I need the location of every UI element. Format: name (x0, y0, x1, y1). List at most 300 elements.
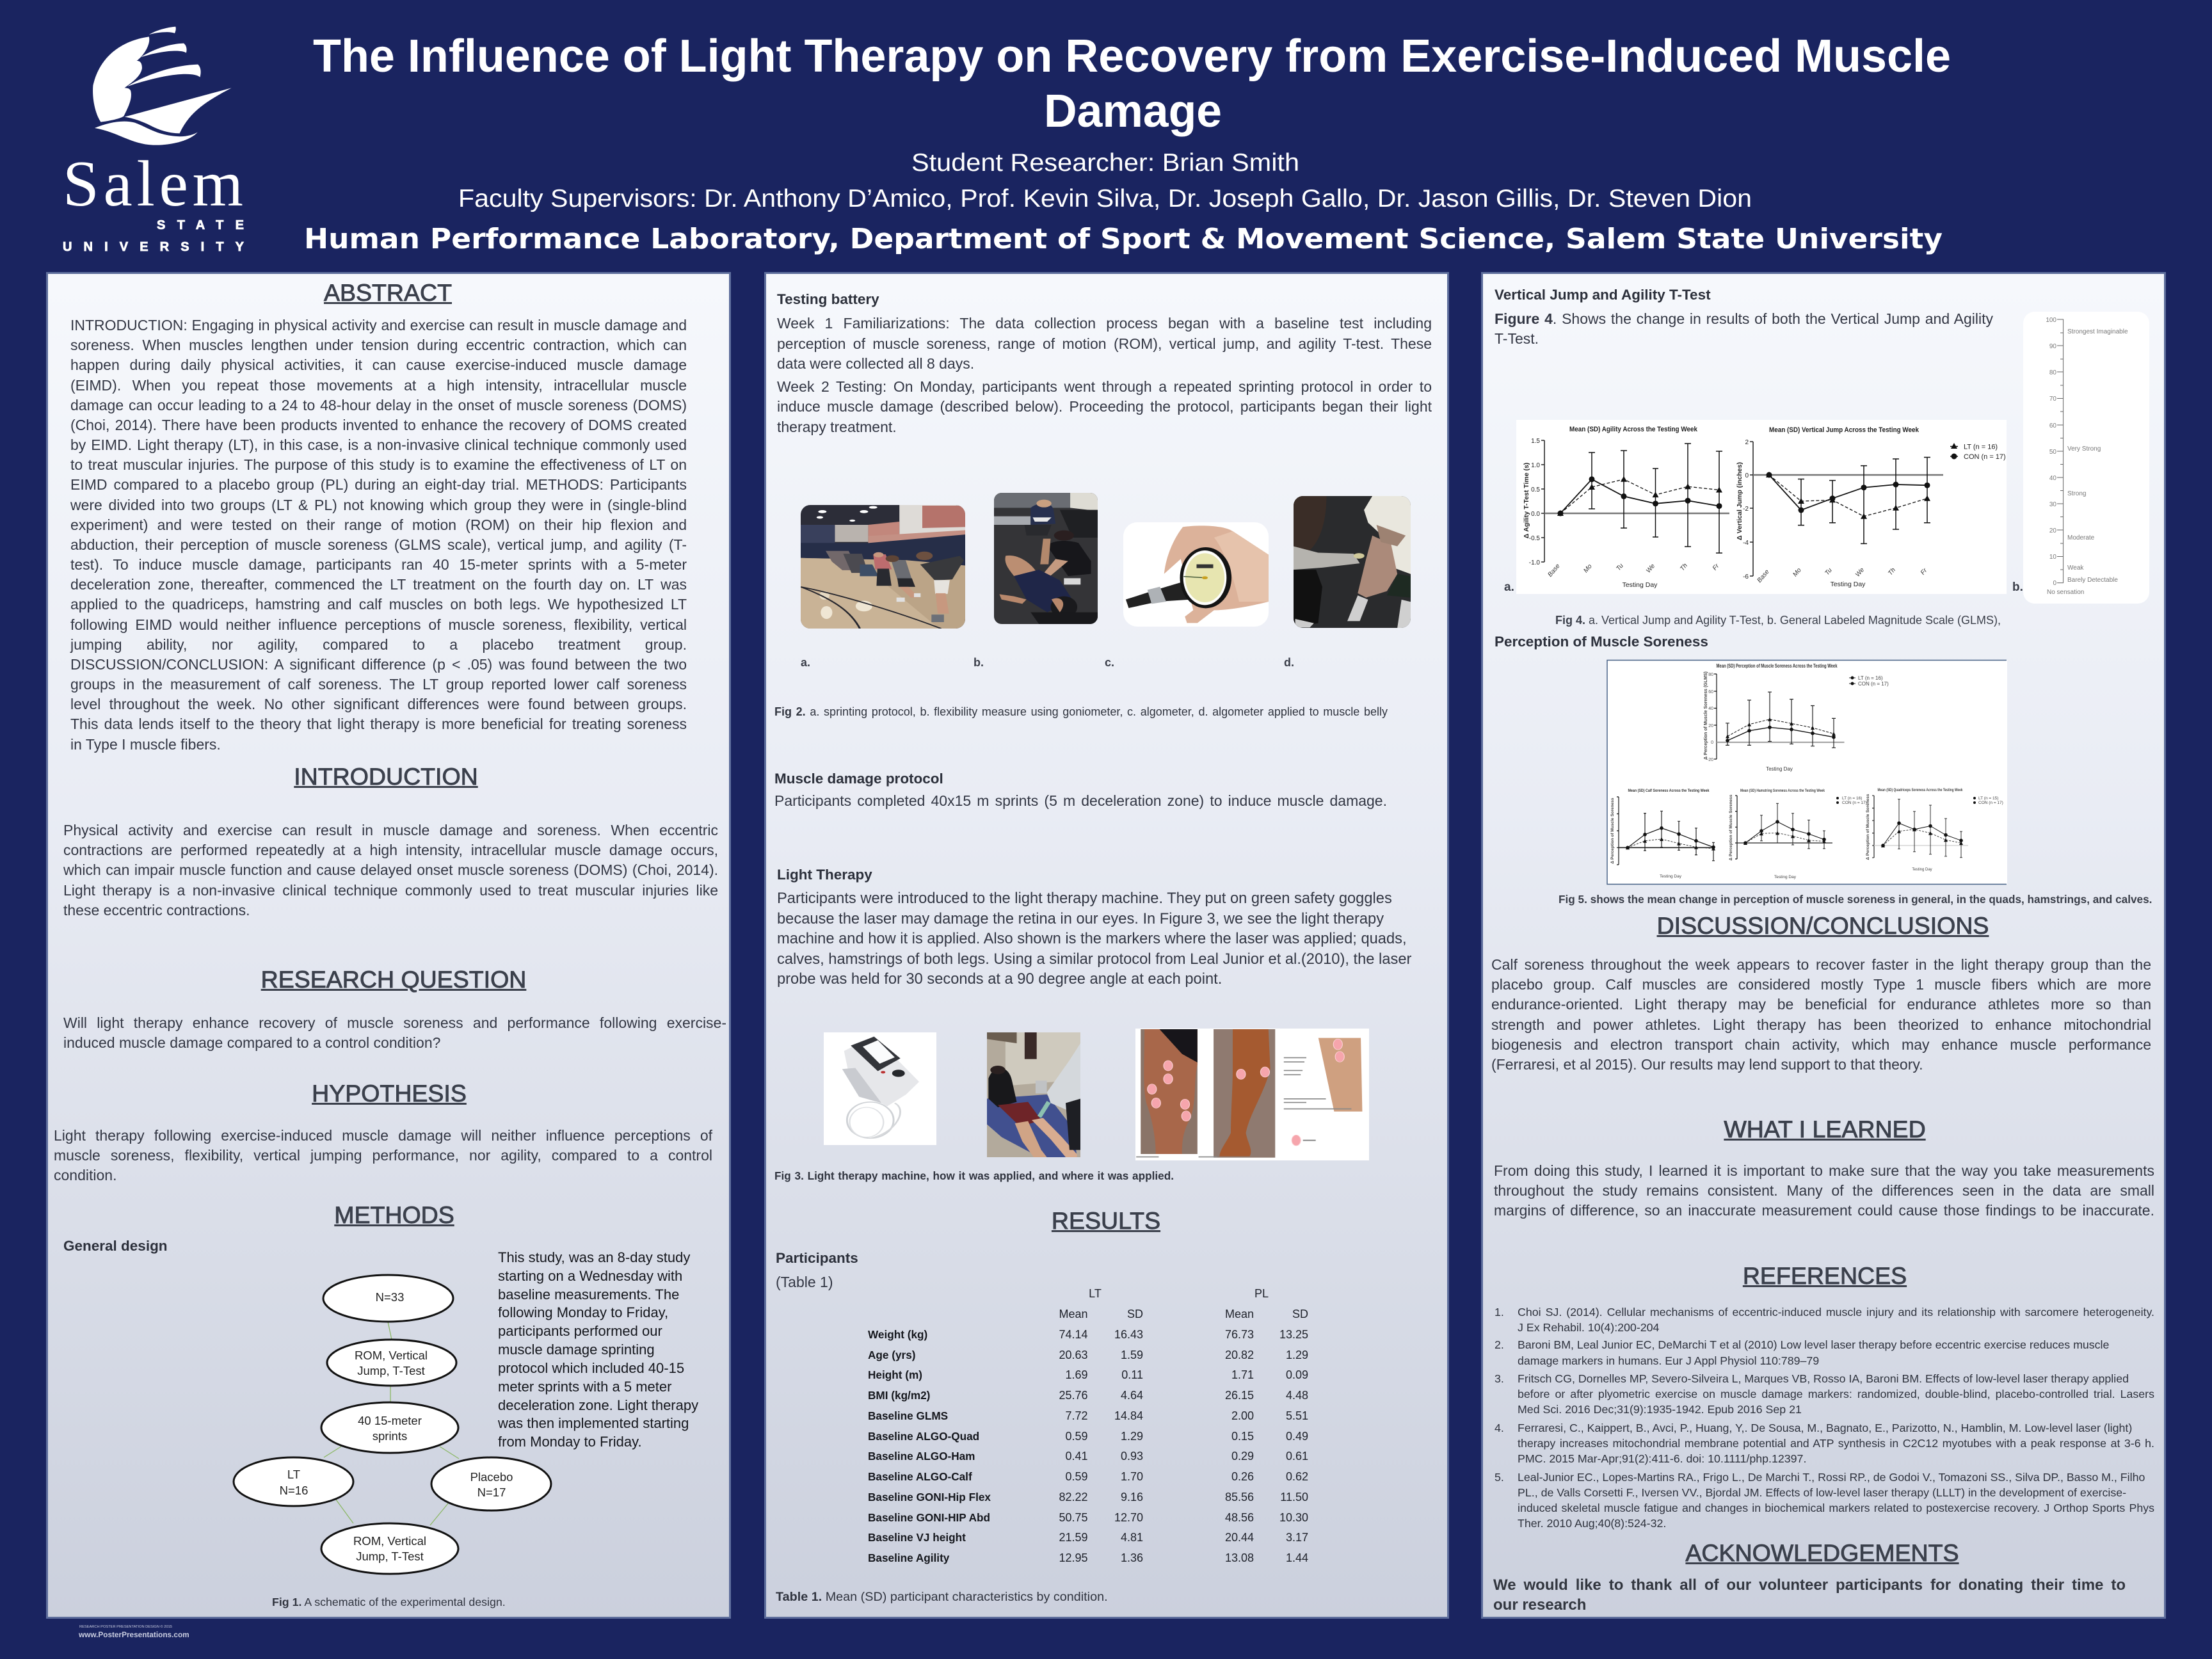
study description text: participants performed our (498, 1323, 662, 1339)
icon: ship sails (93, 27, 232, 145)
node: N=33 (323, 1275, 453, 1322)
chart a: agility: 1.5 (1531, 438, 1540, 445)
chart a: vertical jump: Base (1756, 568, 1771, 584)
chart a: agility: Δ Agility T-Test Time (s) (1523, 463, 1530, 538)
chart: general soreness: CON (n = 17) (1858, 681, 1889, 687)
chart: hamstring soreness: Testing Day (1774, 875, 1797, 879)
photo labels: figure 2 (801, 656, 1294, 669)
node: N=33: N=33 (376, 1290, 404, 1304)
light therapy text: Participants were introduced to the light therapy machine. They put on green safety goggles (777, 890, 1392, 907)
subheading: perception of muscle soreness: Perception of Muscle Soreness (1495, 634, 1708, 650)
table: participant characteristics: 11.50 (1280, 1491, 1308, 1503)
chart: general labeled magnitude scale: 20 (2049, 527, 2056, 534)
chart a: agility: Base (1547, 563, 1562, 579)
abstract text: happen during daily physical activities, it can cause exercise-induced muscle damage (70, 357, 687, 373)
table: participant characteristics: 13.08 (1225, 1551, 1254, 1564)
node: baseline tests (327, 1340, 456, 1386)
chart a: vertical jump: Th (1887, 566, 1897, 577)
photo: algometer (1123, 522, 1269, 627)
table: participant characteristics: 1.71 (1231, 1368, 1254, 1381)
reference list: Fritsch CG, Dornelles MP, Severo-Silveira L, Marques VB, Rosso IA, Baroni BM. Effects of low-level laser therapy applied (1518, 1372, 2129, 1385)
node: placebo group: Placebo (470, 1470, 513, 1484)
table: participant characteristics: 20.44 (1225, 1531, 1254, 1544)
table: participant characteristics: BMI (kg/m2) (868, 1389, 930, 1402)
footer credit: RESEARCH POSTER PRESENTATION DESIGN © 2015 (79, 1625, 172, 1629)
header block (304, 31, 1951, 255)
table: participant characteristics: 0.59 (1065, 1470, 1088, 1483)
testing battery text: Week 2 Testing: On Monday, participants went through a repeated sprinting protocol in order to (777, 378, 1432, 394)
table: participant characteristics: 14.84 (1114, 1409, 1143, 1422)
affiliation: Human Performance Laboratory, Department of Sport & Movement Science, Salem State University (304, 223, 1943, 255)
table: participant characteristics: 12.95 (1059, 1551, 1088, 1564)
table: participant characteristics: 1.59 (1121, 1349, 1143, 1361)
photo: algometer applied (1294, 496, 1411, 628)
chart: general soreness (1704, 663, 1889, 772)
chart: general soreness: 40 (1708, 707, 1713, 711)
study description text: deceleration zone. Light therapy (498, 1397, 698, 1413)
panel: figures and discussion column (1481, 272, 2166, 1619)
chart: hamstring soreness: LT (n = 16) (1842, 796, 1862, 801)
table: participant characteristics: 48.56 (1225, 1511, 1254, 1524)
chart: hamstring soreness (1729, 789, 1867, 879)
title: Damage (1044, 86, 1222, 137)
legend: LT (n = 16) (1964, 443, 1998, 451)
legend: CON (n = 17) (1964, 453, 2006, 461)
hypothesis text: condition. (54, 1167, 116, 1183)
logo wordmark: University: UNIVERSITY (63, 240, 244, 254)
heading: research question: RESEARCH QUESTION (261, 966, 526, 993)
table: participant characteristics: 5.51 (1286, 1409, 1308, 1422)
table: participant characteristics: 20.63 (1059, 1349, 1088, 1361)
flow chart: experimental design (233, 1274, 552, 1575)
table: participant characteristics: 16.43 (1114, 1328, 1143, 1341)
study description text (498, 1249, 698, 1450)
chart a: vertical jump: -2 (1743, 506, 1749, 513)
testing battery text: data were collected all 8 days. (777, 355, 974, 372)
table: participant characteristics: Baseline ALGO-Ham (868, 1450, 975, 1463)
chart: agility and vertical jump (1516, 420, 2007, 594)
reference list: damage markers in humans. Eur J Appl Physiol 110:789–79 (1518, 1354, 1819, 1367)
chart: general labeled magnitude scale: Moderate (2067, 534, 2095, 541)
table: participant characteristics: Baseline Agility (868, 1551, 949, 1564)
chart: calf soreness (1610, 789, 1715, 879)
table: participant characteristics: Baseline GONI-HIP Abd (868, 1511, 990, 1524)
logo wordmark: Salem: Salem (63, 148, 243, 220)
table: participant characteristics: 0.09 (1286, 1368, 1308, 1381)
chart: general labeled magnitude scale: 100 (2046, 317, 2056, 324)
abstract text: level throughout the week. No other significant differences were found between groups. (70, 696, 687, 712)
chart a: vertical jump: Δ Vertical Jump (inches) (1736, 462, 1743, 540)
chart a: vertical jump (1736, 426, 2006, 588)
table: participant characteristics: 20.82 (1225, 1349, 1254, 1361)
table: participant characteristics: 25.76 (1059, 1389, 1088, 1402)
abstract text: following EIMD would neither influence perceptions of muscle soreness, flexibility, vertical (70, 616, 687, 633)
abstract text: EIMD compared to a placebo group (PL) during an eight-day trial. METHODS: Participants (70, 476, 687, 493)
table: participant characteristics: 1.44 (1286, 1551, 1308, 1564)
introduction text: contractions are performed repeatedly at a high intensity, intracellular muscle damage occurs, (63, 842, 718, 858)
acknowledgements text: our research (1493, 1596, 1586, 1614)
table: participant characteristics: 85.56 (1225, 1491, 1254, 1503)
chart a: vertical jump: -6 (1743, 573, 1749, 581)
chart: general labeled magnitude scale: 0 (2053, 580, 2056, 587)
abstract text: to treat muscular injuries. The purpose of this study is to examine the effectiveness of LT on (70, 456, 687, 473)
reference list: induced skeletal muscle fatigue and changes in biochemical markers related to postexercise recovery. J Orthop Sports Phys (1518, 1502, 2154, 1514)
reference list: 4. (1495, 1422, 1504, 1434)
table: participant characteristics: PL (1254, 1287, 1269, 1300)
caption: figure 2: Fig 2. a. sprinting protocol, b. flexibility measure using goniometer, c. algometer, d. algometer applied to muscle belly (774, 705, 1388, 718)
reference list: Med Sci. 2016 Dec;31(9):1935-1942. Epub 2016 Sep 21 (1518, 1403, 1802, 1416)
chart: general labeled magnitude scale: 60 (2049, 422, 2056, 429)
table: participant characteristics: Baseline ALGO-Quad (868, 1430, 979, 1443)
node: post tests (321, 1523, 458, 1574)
chart a: agility: Testing Day (1623, 581, 1658, 589)
reference list: Leal-Junior EC., Lopes-Martins RA., Frigo L., De Marchi T., Rossi RP., de Godoi V., Tomazoni SS., Silva DP., Basso M., Filho (1518, 1471, 2145, 1484)
chart: calf soreness: Mean (SD) Calf Soreness Across the Testing Week (1628, 789, 1710, 793)
table: participant characteristics: 3.17 (1286, 1531, 1308, 1544)
discussion text: biogenesis and electron transport chain activity, which may enhance muscle performance (1491, 1036, 2151, 1053)
table: participant characteristics (868, 1287, 1308, 1564)
chart: general labeled magnitude scale: Very Strong (2067, 445, 2101, 453)
subheading: testing battery: Testing battery (777, 291, 879, 307)
chart: general soreness: 80 (1708, 673, 1713, 677)
abstract text: test). To induce muscle damage, participants ran 40 15-meter sprints with a 5-meter (70, 556, 687, 573)
what I learned text: From doing this study, I learned it is important to make sure that the way you take measurements (1494, 1162, 2154, 1179)
figure 4 intro text: T-Test. (1495, 330, 1539, 347)
table: participant characteristics: 0.26 (1231, 1470, 1254, 1483)
study description text: protocol which included 40-15 (498, 1360, 684, 1376)
chart a: agility: Th (1679, 562, 1689, 572)
node: sprints (321, 1402, 458, 1453)
abstract text (70, 317, 687, 753)
abstract text: (Choi, 2014). There have been products invented to enhance the recovery of DOMS created (70, 417, 687, 433)
chart: general labeled magnitude scale: 80 (2049, 369, 2056, 376)
chart: calf soreness: Δ Perception of Muscle Soreness (1610, 797, 1615, 863)
acknowledgements text (1493, 1576, 2126, 1614)
chart labels a and b: a. (1504, 581, 1514, 594)
legend (1950, 443, 2006, 461)
chart a: agility: 0.0 (1531, 511, 1540, 518)
abstract text: deceleration zone, thereafter, commenced the LT treatment on the fourth day on. LT was (70, 576, 687, 593)
table: participant characteristics: 0.49 (1286, 1430, 1308, 1443)
chart: general soreness: 60 (1708, 690, 1713, 694)
chart a: vertical jump: We (1854, 566, 1866, 579)
table: participant characteristics: 0.62 (1286, 1470, 1308, 1483)
subheading: vertical jump and agility: Vertical Jump and Agility T-Test (1495, 287, 1711, 303)
table: participant characteristics: 4.64 (1121, 1389, 1143, 1402)
university logo (63, 27, 244, 254)
chart: general soreness: -20 (1707, 758, 1713, 762)
table: participant characteristics: Age (yrs) (868, 1349, 915, 1361)
table: participant characteristics: Mean (1225, 1308, 1254, 1320)
reference list: before or after plyometric exercise on muscle damage markers: randomized, double-blind, placebo-controlled trial. Lasers (1518, 1388, 2154, 1400)
table: participant characteristics: 0.11 (1121, 1368, 1143, 1381)
chart: general soreness: LT (n = 16) (1858, 675, 1883, 681)
photo labels: figure 2: a. (801, 656, 810, 669)
abstract text: (EIMD). When you repeat those movements at a high intensity, intracellular muscle (70, 377, 687, 394)
introduction text: these eccentric contractions. (63, 902, 250, 918)
table: participant characteristics: 1.36 (1121, 1551, 1143, 1564)
discussion text: strength and power athletes. Light therapy has been theorized to enhance mitochondrial (1491, 1016, 2151, 1033)
chart: general labeled magnitude scale: 50 (2049, 449, 2056, 456)
chart labels a and b: b. (2012, 581, 2023, 594)
node: post tests: ROM, Vertical (353, 1534, 426, 1548)
chart a: agility: Fr (1711, 563, 1721, 572)
chart: general soreness: Mean (SD) Perception of Muscle Soreness Across the Testing Week (1717, 663, 1838, 669)
chart: quadriceps soreness: CON (n = 17) (1978, 801, 2003, 805)
chart a: vertical jump: Fr (1919, 567, 1929, 577)
node: LT group (234, 1457, 353, 1506)
chart: general soreness: 0 (1711, 741, 1713, 745)
table: participant characteristics: Height (m) (868, 1368, 922, 1381)
reference list: J Ex Rehabil. 10(4):200-204 (1518, 1321, 1659, 1334)
study description text: This study, was an 8-day study (498, 1249, 690, 1265)
chart a: vertical jump: Tu (1823, 566, 1834, 577)
chart: calf soreness: Testing Day (1660, 874, 1682, 879)
table: participant characteristics: 76.73 (1225, 1328, 1254, 1341)
reference list: 5. (1495, 1471, 1504, 1484)
chart: muscle soreness (1607, 659, 2007, 885)
chart: general labeled magnitude scale: Strong (2067, 490, 2086, 497)
research question text: Will light therapy enhance recovery of muscle soreness and performance following exercise- (63, 1014, 726, 1031)
chart: general labeled magnitude scale: 70 (2049, 396, 2056, 403)
chart a: agility: 0.5 (1531, 486, 1540, 493)
hypothesis text: muscle soreness, flexibility, vertical jumping performance, nor agility, compared to a control (54, 1147, 712, 1164)
chart a: vertical jump: -4 (1743, 540, 1749, 547)
logo wordmark: State: STATE (157, 218, 244, 232)
study description text: meter sprints with a 5 meter (498, 1379, 671, 1395)
table: participant characteristics: 4.81 (1121, 1531, 1143, 1544)
study description text: muscle damage sprinting (498, 1342, 655, 1358)
caption: figure 3: Fig 3. Light therapy machine, how it was applied, and where it was applied. (774, 1169, 1174, 1182)
table: participant characteristics: 82.22 (1059, 1491, 1088, 1503)
node: baseline tests: ROM, Vertical (355, 1349, 428, 1362)
abstract text: in Type I muscle fibers. (70, 736, 221, 753)
reference list: 1. (1495, 1306, 1504, 1318)
table: participant characteristics: Mean (1059, 1308, 1088, 1320)
table: participant characteristics: 26.15 (1225, 1389, 1254, 1402)
reference list: PMC. 2015 Mar-Apr;91(2):411-6. doi: 10.1111/php.12397. (1518, 1452, 1806, 1465)
chart: general soreness: Testing Day (1766, 766, 1793, 772)
chart a: vertical jump: 0 (1745, 472, 1749, 479)
table: participant characteristics: Baseline GONI-Hip Flex (868, 1491, 991, 1503)
table: participant characteristics: 9.16 (1121, 1491, 1143, 1503)
node: LT group: N=16 (280, 1484, 308, 1497)
table: participant characteristics: 50.75 (1059, 1511, 1088, 1524)
chart: hamstring soreness: Δ Perception of Muscle Soreness (1729, 794, 1733, 860)
reference list: therapy increases mitochondrial membrane potential and ATP synthesis in C2C12 myotubes with a peak response at 3-6 h. (1518, 1437, 2154, 1450)
abstract text: applied to the quadriceps, hamstring and calf muscles on both legs. We hypothesized LT (70, 596, 687, 613)
chart a: agility: Mean (SD) Agility Across the Testing Week (1569, 426, 1698, 433)
study description text: was then implemented starting (498, 1415, 689, 1431)
photo: sprinting protocol (801, 505, 965, 629)
light therapy text: because the laser may damage the retina in our eyes. In Figure 3, we see the light therapy (777, 910, 1384, 927)
testing battery text: induce muscle damage (described below). Proceeding the protocol, participants began their light (777, 398, 1432, 415)
chart a: agility: Mo (1582, 563, 1594, 574)
introduction text: Physical activity and exercise can result in muscle damage and soreness. When eccentric (63, 822, 718, 838)
caption: figure 5: Fig 5. shows the mean change in perception of muscle soreness in general, in the quads, hamstrings, and calves. (1559, 893, 2152, 906)
research question text: induced muscle damage compared to a control condition? (63, 1034, 440, 1051)
abstract text: This data lends itself to the theory that light therapy is more beneficial for treating soreness (70, 716, 687, 732)
light therapy text (777, 890, 1411, 988)
study description text: following Monday to Friday, (498, 1304, 668, 1320)
figure 4 intro text (1495, 310, 1993, 347)
chart a: vertical jump: Mo (1791, 566, 1803, 578)
discussion text: placebo group. Calf muscles are considered mostly Type 1 muscle fibers which are more (1491, 976, 2151, 993)
chart: quadriceps soreness: LT (n = 15) (1978, 796, 1998, 801)
heading: introduction: INTRODUCTION (294, 763, 478, 790)
photo labels: figure 2: c. (1105, 656, 1114, 669)
study description text: from Monday to Friday. (498, 1434, 642, 1450)
heading: hypothesis: HYPOTHESIS (312, 1080, 467, 1107)
light therapy text: machine and how it is applied. Also shown is the markers where the laser was applied; quads, (777, 931, 1407, 947)
student researcher: Student Researcher: Brian Smith (911, 149, 1299, 177)
chart a: agility (1523, 426, 1729, 589)
table: participant characteristics: 1.29 (1286, 1349, 1308, 1361)
table: participant characteristics: 0.15 (1231, 1430, 1254, 1443)
caption: table 1: Table 1. Mean (SD) participant characteristics by condition. (776, 1590, 1108, 1604)
what I learned text: throughout the study remains consistent. Many of the differences seen in the data are small (1494, 1182, 2154, 1199)
chart: quadriceps soreness: Δ Perception of Muscle Soreness (1866, 794, 1870, 860)
chart: general labeled magnitude scale: 90 (2049, 343, 2056, 350)
subheading: light therapy: Light Therapy (777, 867, 872, 883)
table: participant characteristics: 1.70 (1121, 1470, 1143, 1483)
study description text: starting on a Wednesday with (498, 1268, 682, 1284)
photo: laser being applied (987, 1032, 1080, 1157)
testing battery text: therapy treatment. (777, 419, 897, 435)
table: participant characteristics: 0.93 (1121, 1450, 1143, 1463)
photo: light therapy machine (824, 1032, 936, 1145)
chart a: agility: 1.0 (1531, 462, 1540, 469)
table reference: (Table 1) (776, 1274, 833, 1290)
abstract text: experiment) and were tested on their range of motion (ROM) on their hip flexion and (70, 517, 687, 533)
node: sprints: 40 15-meter (358, 1414, 422, 1427)
table: participant characteristics: 0.59 (1065, 1430, 1088, 1443)
footer credit: www.PosterPresentations.com (79, 1630, 189, 1639)
chart labels a and b (1504, 581, 2023, 594)
title (313, 31, 1951, 137)
abstract text: abduction, their perception of muscle soreness (GLMS scale), vertical jump, and agility (T- (70, 536, 687, 553)
reference list: Choi SJ. (2014). Cellular mechanisms of eccentric-induced muscle injury and its relationship with sarcomere heterogeneity. (1518, 1306, 2154, 1318)
node: placebo group (431, 1457, 551, 1511)
introduction text (63, 822, 718, 918)
reference list: 2. (1495, 1338, 1504, 1351)
title: The Influence of Light Therapy on Recovery from Exercise-Induced Muscle (313, 31, 1951, 82)
table: participant characteristics: SD (1127, 1308, 1143, 1320)
table: participant characteristics: 0.29 (1231, 1450, 1254, 1463)
what I learned text: margins of difference, so an inaccurate measurement could cause those findings to be inaccurate. (1494, 1202, 2154, 1219)
chart: general labeled magnitude scale: Weak (2067, 565, 2084, 572)
testing battery text (777, 315, 1432, 435)
discussion text (1491, 956, 2151, 1073)
muscle damage protocol text: Participants completed 40x15 m sprints (5 m deceleration zone) to induce muscle damage. (774, 792, 1387, 809)
photo: laser application points (1135, 1029, 1369, 1160)
photo labels: figure 2: d. (1284, 656, 1294, 669)
chart: hamstring soreness: CON (n = 17) (1842, 801, 1867, 805)
chart: general labeled magnitude scale: 10 (2049, 554, 2056, 561)
chart a: vertical jump: Mean (SD) Vertical Jump Across the Testing Week (1769, 426, 1919, 434)
discussion text: Calf soreness throughout the week appears to recover faster in the light therapy group than the (1491, 956, 2151, 973)
panel: testing and results column (764, 272, 1449, 1619)
table: participant characteristics: 0.61 (1286, 1450, 1308, 1463)
table: participant characteristics: 74.14 (1059, 1328, 1088, 1341)
introduction text: which can impair muscle function and cause delayed onset muscle soreness (DOMS) (Choi, 2014). (63, 862, 718, 878)
node: LT group: LT (287, 1468, 300, 1481)
what I learned text (1494, 1162, 2154, 1219)
introduction text: Light therapy is a non-invasive clinical technique commonly used to treat muscular injuries like (63, 882, 718, 899)
table: participant characteristics: Baseline ALGO-Calf (868, 1470, 972, 1483)
node: sprints: sprints (373, 1429, 407, 1443)
table: participant characteristics: 10.30 (1279, 1511, 1308, 1524)
heading: abstract: ABSTRACT (324, 279, 452, 306)
chart: quadriceps soreness: Testing Day (1912, 868, 1932, 872)
chart: quadriceps soreness (1866, 789, 2003, 872)
study description text: baseline measurements. The (498, 1286, 679, 1302)
chart a: agility: Tu (1615, 562, 1625, 572)
abstract text: damage can occur leading to a 24 to 48-hour delay in the onset of muscle soreness (DOMS) (70, 397, 687, 413)
reference list (1495, 1306, 2154, 1530)
table: participant characteristics: SD (1292, 1308, 1308, 1320)
chart: general labeled magnitude scale: 40 (2049, 475, 2056, 482)
heading: acknowledgements: ACKNOWLEDGEMENTS (1685, 1539, 1959, 1566)
table: participant characteristics: 13.25 (1279, 1328, 1308, 1341)
caption: figure 4: Fig 4. a. Vertical Jump and Agility T-Test, b. General Labeled Magnitude Scale (GLMS), (1555, 614, 2001, 627)
hypothesis text: Light therapy following exercise-induced muscle damage will neither influence perceptions of (54, 1127, 712, 1144)
footer credit (79, 1625, 189, 1639)
abstract text: by EIMD. Light therapy (LT), in this case, is a non-invasive clinical technique commonly used (70, 437, 687, 453)
research question text (63, 1014, 726, 1051)
table: participant characteristics: Baseline GLMS (868, 1409, 948, 1422)
light therapy text: calves, hamstrings of both legs. Using a similar protocol from Leal Junior et al.(2010), the laser (777, 951, 1411, 968)
abstract text: were divided into two groups (LT & PL) not knowing which group they were in (single-blind (70, 497, 687, 513)
subheading: general design: General design (63, 1238, 168, 1254)
table: participant characteristics: 4.48 (1286, 1389, 1308, 1402)
reference list: PL., de Valls Corsetti F., Iversen VV., Bjordal JM. Effects of low-level laser therapy (LLLT) in the development of exercise- (1518, 1486, 2126, 1499)
chart: quadriceps soreness: Mean (SD) Quadriceps Soreness Across the Testing Week (1878, 789, 1963, 792)
chart: general labeled magnitude scale: Strongest Imaginable (2067, 328, 2128, 335)
photo labels: figure 2: b. (974, 656, 984, 669)
node: placebo group: N=17 (477, 1486, 506, 1499)
figure 4 intro text: Figure 4. Shows the change in results of both the Vertical Jump and Agility (1495, 310, 1993, 327)
chart: general labeled magnitude scale: No sensation (2047, 589, 2084, 596)
table: participant characteristics: 0.41 (1065, 1450, 1088, 1463)
table: participant characteristics: 2.00 (1231, 1409, 1254, 1422)
table: participant characteristics: LT (1089, 1287, 1102, 1300)
chart: hamstring soreness: Mean (SD) Hamstring Soreness Across the Testing Week (1740, 789, 1825, 793)
abstract text: soreness. When muscles lengthen under tension during eccentric contraction, which can (70, 337, 687, 353)
heading: what I learned: WHAT I LEARNED (1724, 1116, 1926, 1142)
table: participant characteristics: Weight (kg) (868, 1328, 927, 1341)
subheading: participants: Participants (776, 1250, 858, 1266)
table: participant characteristics: Baseline VJ height (868, 1531, 966, 1544)
faculty supervisors: Faculty Supervisors: Dr. Anthony D’Amico, Prof. Kevin Silva, Dr. Joseph Gallo, Dr. Jason Gillis, Dr. Steven Dion (458, 185, 1752, 212)
chart a: vertical jump: 2 (1745, 439, 1749, 446)
photo: flexibility measure (994, 493, 1098, 624)
reference list: Ferraresi, C., Kaippert, B., Avci, P., Huang, Y,. De Sousa, M., Bagnato, E., Parizotto, N., Hamblin, M. Low-level laser (light) (1518, 1422, 2132, 1434)
node: baseline tests: Jump, T-Test (357, 1364, 425, 1377)
heading: discussion and conclusions: DISCUSSION/CONCLUSIONS (1657, 912, 1989, 939)
chart: general soreness: 20 (1708, 724, 1713, 728)
hypothesis text (54, 1127, 713, 1183)
node: post tests: Jump, T-Test (356, 1550, 424, 1563)
testing battery text: perception of muscle soreness, range of motion (ROM), vertical jump, and agility T-test. These (777, 335, 1432, 352)
table: participant characteristics: 12.70 (1114, 1511, 1143, 1524)
chart: general labeled magnitude scale (2023, 312, 2149, 604)
chart: general labeled magnitude scale: 30 (2049, 501, 2056, 508)
chart a: agility: We (1645, 563, 1656, 575)
heading: references: REFERENCES (1743, 1262, 1907, 1289)
heading: results: RESULTS (1052, 1207, 1160, 1234)
reference list: 3. (1495, 1372, 1504, 1385)
